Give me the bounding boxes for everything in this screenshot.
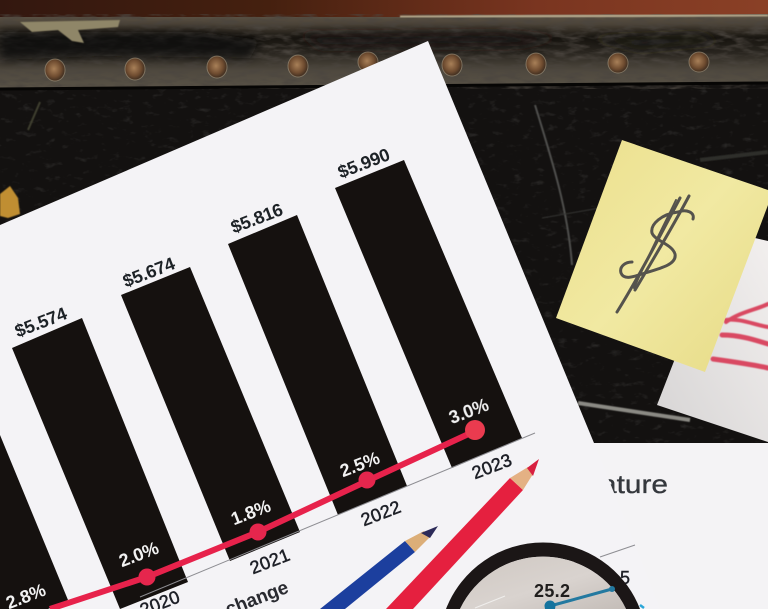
year labels: 2021 xyxy=(247,545,293,578)
metal band xyxy=(0,14,768,89)
icon: hand-drawn dollar sign xyxy=(617,196,693,312)
year labels: 2022 xyxy=(358,497,404,530)
orange paint chip xyxy=(0,186,20,218)
bar 2023 xyxy=(335,160,522,468)
value fragment: 5 xyxy=(620,568,630,588)
value labels xyxy=(12,144,393,341)
icon: magnifying glass xyxy=(446,543,644,609)
board scratches xyxy=(28,102,768,420)
icon: blue pencil xyxy=(320,526,438,609)
bar chart xyxy=(0,160,535,609)
yellow sticky note xyxy=(556,140,768,372)
partial heading text: ature xyxy=(600,469,668,499)
percent labels xyxy=(3,395,492,609)
bar 2021 xyxy=(121,267,300,561)
bar 2019 xyxy=(0,435,68,609)
value labels: $5.674 xyxy=(120,253,178,291)
red trend line xyxy=(50,420,485,609)
bar 2022 xyxy=(228,215,407,515)
year labels: 2023 xyxy=(469,450,515,483)
year labels xyxy=(137,450,515,609)
magnified value label: 25.2 xyxy=(534,581,570,601)
percent labels: 2.5% xyxy=(337,448,383,481)
white note with red marks xyxy=(657,238,768,442)
percent labels: 3.0% xyxy=(446,395,492,428)
value labels: $5.816 xyxy=(228,199,286,237)
value labels: $5.990 xyxy=(335,144,393,182)
bar 2020 xyxy=(12,318,188,609)
magnified line chart xyxy=(544,586,644,609)
percent labels: 1.8% xyxy=(228,496,274,529)
lower right paper xyxy=(590,443,768,609)
value labels: $5.574 xyxy=(12,303,70,341)
rivets xyxy=(45,52,709,81)
axis line xyxy=(140,433,535,597)
faint chart line on lower paper xyxy=(600,545,635,557)
icon: red pencil xyxy=(386,459,539,609)
wooden table strip xyxy=(0,0,768,18)
percent labels: 2.0% xyxy=(116,538,162,571)
